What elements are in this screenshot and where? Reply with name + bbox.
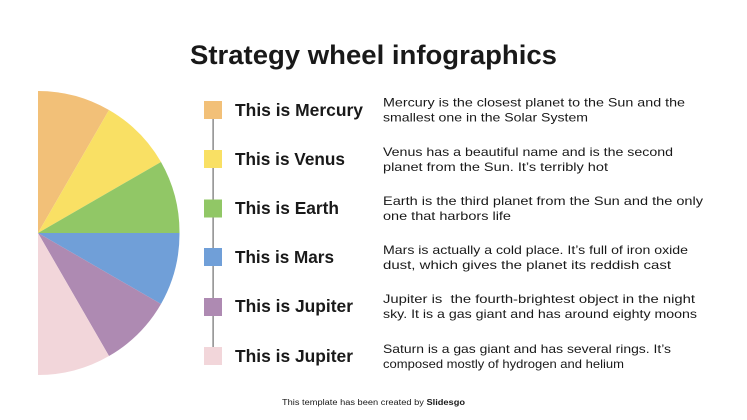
heading: Mercury: This is Mercury xyxy=(235,100,363,120)
description: Mercury: Mercury is the closest planet to the Sun and the xyxy=(383,96,685,110)
description: Jupiter: Jupiter is the fourth-brightest object in the night xyxy=(383,292,696,306)
row: Earth xyxy=(204,194,703,223)
heading: Mars: This is Mars xyxy=(235,247,334,267)
description: Saturn: composed mostly of hydrogen and helium xyxy=(383,357,624,371)
wheel segment: Saturn xyxy=(38,233,109,375)
heading: Venus: This is Venus xyxy=(235,149,345,169)
marker: Venus xyxy=(204,150,222,168)
marker: Saturn xyxy=(204,347,222,365)
row: Venus xyxy=(204,145,673,174)
description: Earth: Earth is the third planet from the Sun and the only xyxy=(383,194,703,208)
row: Saturn xyxy=(204,342,671,371)
heading: Saturn row: This is Jupiter xyxy=(235,346,353,366)
description: Saturn: Saturn is a gas giant and has several rings. It’s xyxy=(383,342,671,356)
description: Mercury xyxy=(383,96,685,125)
heading: Earth: This is Earth xyxy=(235,198,339,218)
row: Mercury xyxy=(204,96,685,125)
description: Venus: Venus has a beautiful name and is the second xyxy=(383,145,673,159)
heading: Jupiter: This is Jupiter xyxy=(235,296,353,316)
wheel segment: Mercury xyxy=(38,91,109,233)
description: Jupiter xyxy=(383,292,697,321)
marker: Jupiter xyxy=(204,298,222,316)
description: Venus: planet from the Sun. It’s terribly hot xyxy=(383,160,609,174)
description: Earth: one that harbors life xyxy=(383,209,511,223)
timeline connector xyxy=(212,110,214,356)
wheel segment: Earth xyxy=(38,162,180,233)
wheel segment: Venus xyxy=(38,110,161,233)
title: Strategy wheel infographics xyxy=(190,40,557,70)
marker: Mercury xyxy=(204,101,222,119)
wheel segment: Mars xyxy=(38,233,180,304)
description: Mars: Mars is actually a cold place. It’s full of iron oxide xyxy=(383,243,688,257)
description: Mars: dust, which gives the planet its reddish cast xyxy=(383,258,672,272)
wheel segment: Jupiter xyxy=(38,233,161,356)
footer credit: This template has been created by Slidesgo xyxy=(282,398,465,407)
description: Earth xyxy=(383,194,703,223)
row: Mars xyxy=(204,243,688,272)
strategy wheel xyxy=(38,91,180,375)
row: Jupiter xyxy=(204,292,697,321)
description: Venus xyxy=(383,145,673,174)
marker: Earth xyxy=(204,200,222,218)
description: Mercury: smallest one in the Solar System xyxy=(383,111,588,125)
description: Jupiter: sky. It is a gas giant and has around eighty moons xyxy=(383,307,697,321)
marker: Mars xyxy=(204,248,222,266)
description: Mars xyxy=(383,243,688,272)
description: Saturn xyxy=(383,342,671,371)
